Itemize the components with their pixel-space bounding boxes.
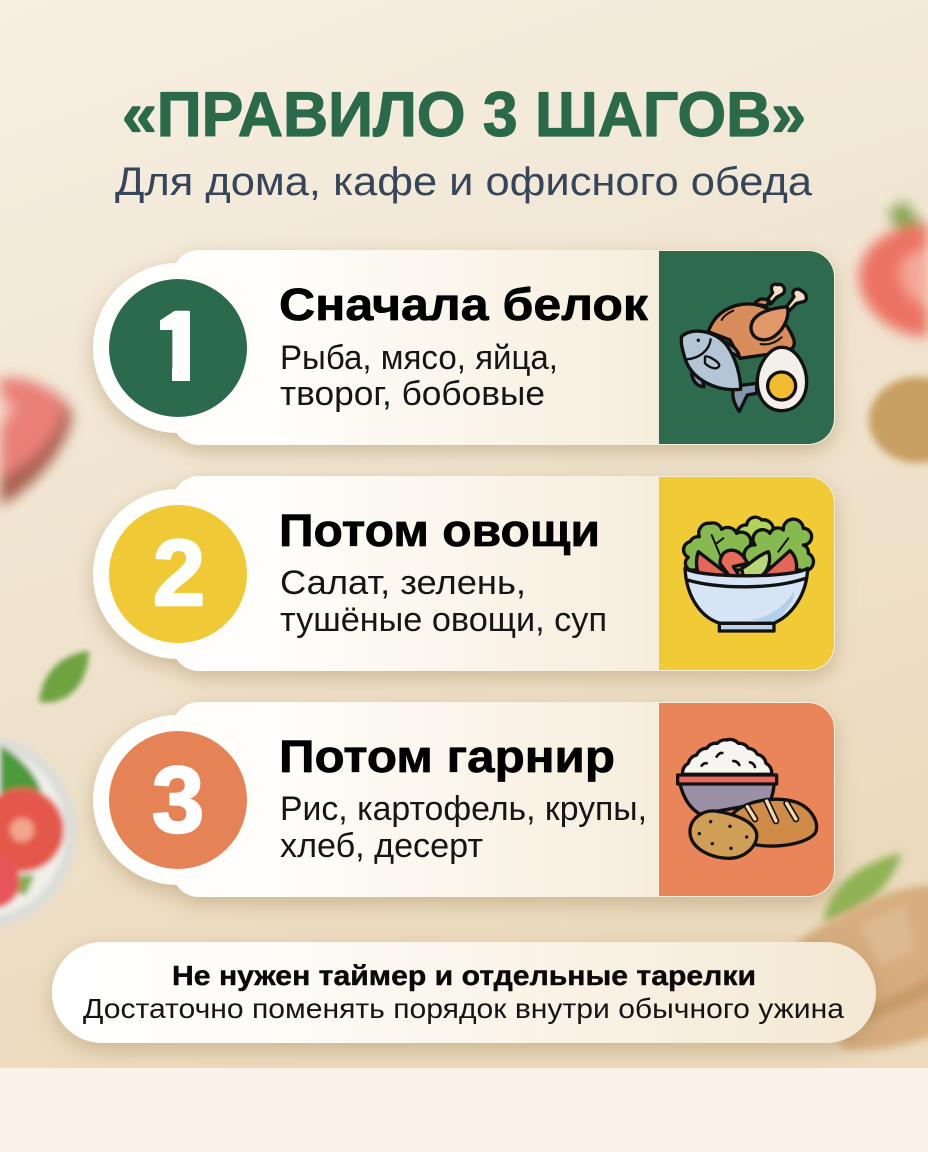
card background [93,250,835,445]
card background [93,476,835,671]
heading: Потом овощи [279,505,600,556]
description [280,564,607,639]
number badge 1: 1 [152,292,207,402]
number badge 2: 2 [153,520,205,625]
panel: bottom note [52,942,876,1043]
subtitle: Для дома, кафе и офисного обеда [115,160,813,204]
number badge 3: 3 [152,747,204,852]
description: творог, бобовые [280,375,545,413]
heading: Потом гарнир [279,731,615,782]
number badge 3 [109,731,247,869]
description: Рис, картофель, крупы, [280,790,647,828]
description [280,339,558,413]
panel: step 3 side dish [93,702,835,897]
blurred meat left [0,378,72,506]
color tile [659,477,834,670]
icon: chicken, fish and egg [681,284,807,411]
blurred salad plate left [0,735,77,929]
blurred basil leaf left [39,651,89,703]
description: Рыба, мясо, яйца, [280,339,558,377]
heading: Сначала белок [279,279,649,330]
number badge 2 [109,505,247,643]
blurred tomato top right [859,200,928,337]
title: «ПРАВИЛО 3 ШАГОВ» [122,80,806,150]
icon: rice, bread and potato [678,739,817,858]
pill background [52,942,876,1043]
note text: Достаточно поменять порядок внутри обычного ужина [83,993,844,1024]
description: Салат, зелень, [280,564,526,602]
description: хлеб, десерт [280,827,483,865]
blurred potato right [869,377,928,463]
panel: step 1 protein [93,250,835,445]
color tile [659,251,834,444]
description [280,790,647,865]
number badge 1 [109,279,247,417]
panel: step 2 vegetables [93,476,835,671]
icon: salad bowl [684,517,813,631]
blurred leaf and bread bottom right [797,853,928,1050]
note heading: Не нужен таймер и отдельные тарелки [172,960,756,991]
card background [93,702,835,897]
color tile [659,703,834,896]
description: тушёные овощи, суп [280,601,607,639]
